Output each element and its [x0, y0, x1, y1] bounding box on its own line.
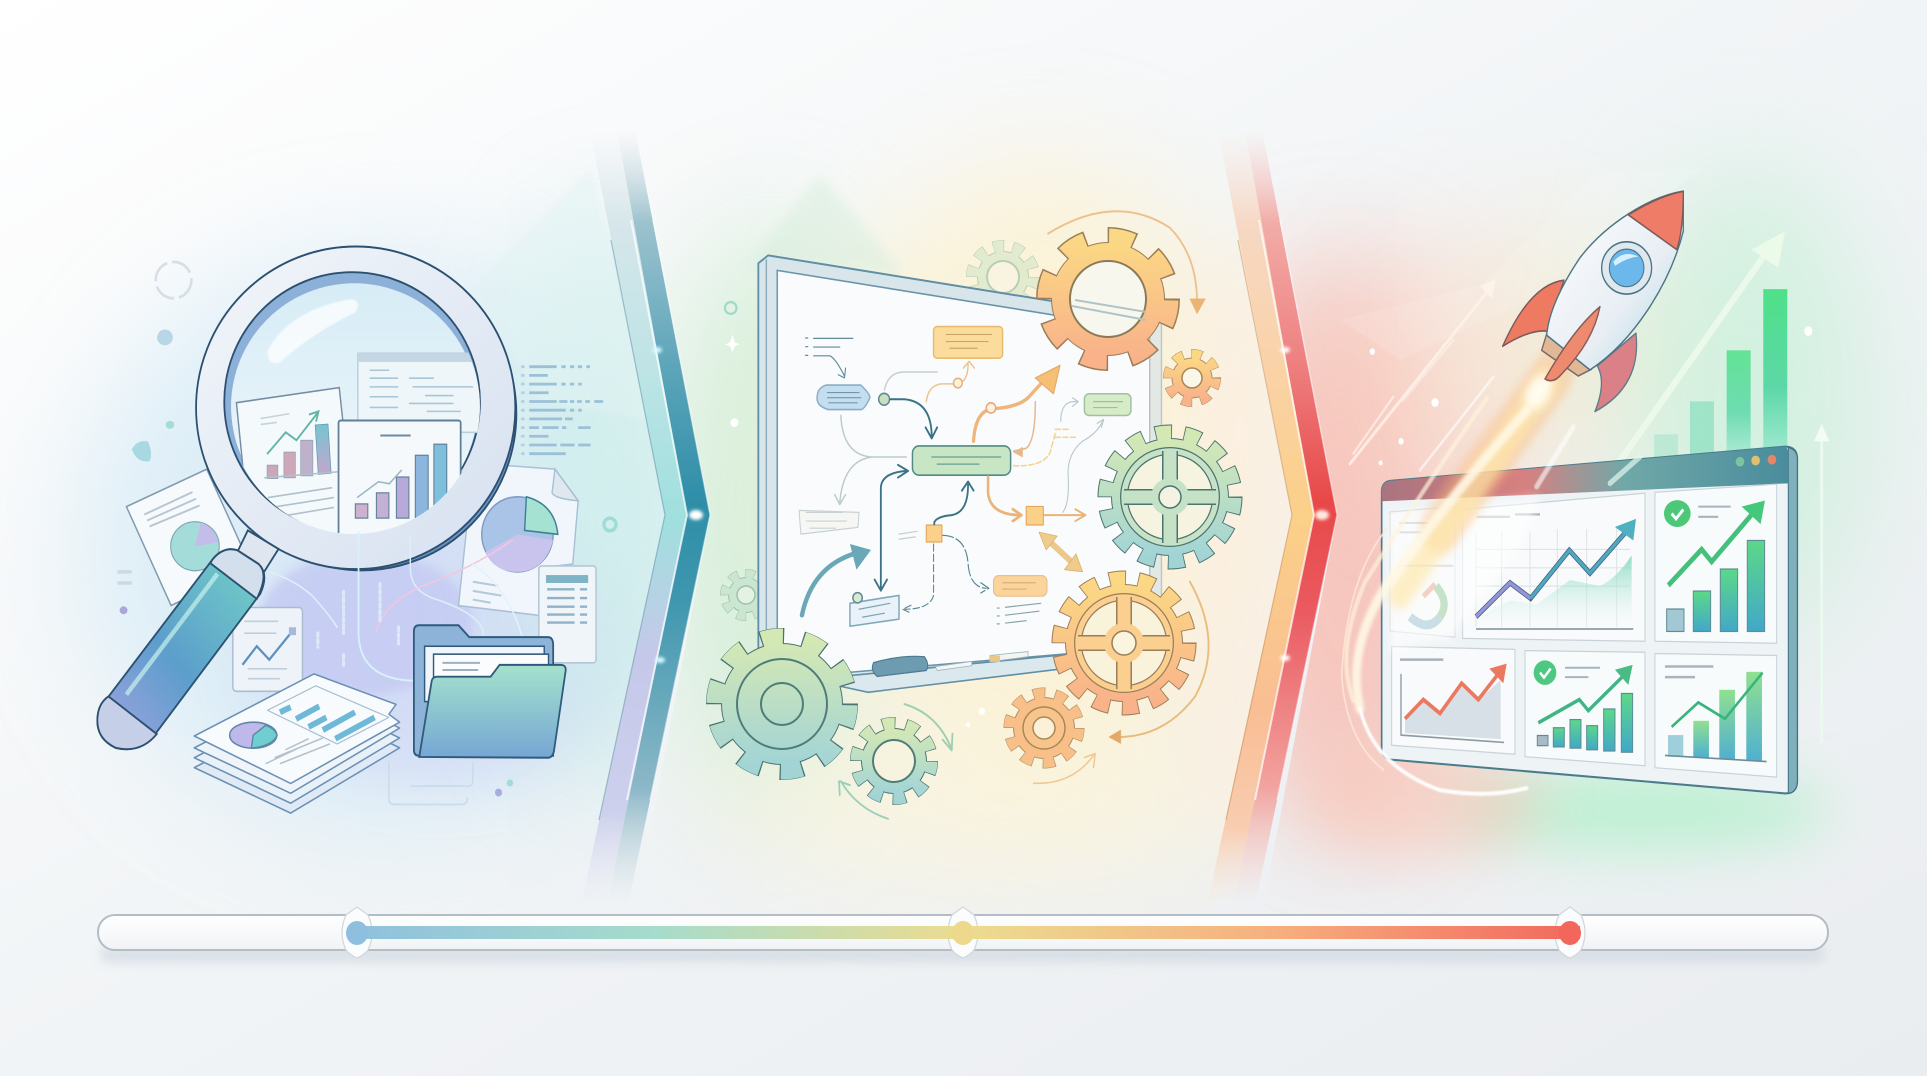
left fin [1503, 280, 1564, 346]
node: middle [952, 921, 974, 945]
gear: faint top [973, 247, 1033, 307]
code lines [521, 367, 603, 454]
lens contents [236, 353, 483, 537]
orange sticky note [934, 327, 1003, 358]
square node with branches [926, 525, 942, 542]
rocket [1503, 191, 1683, 412]
folder [414, 625, 566, 758]
card: donut [1390, 507, 1455, 637]
card: main line chart [1463, 493, 1645, 641]
card: mixed bars [1655, 653, 1777, 777]
card: green bars [1525, 651, 1645, 766]
rocket flame core [1519, 368, 1557, 416]
orange note, lower right [994, 576, 1047, 596]
lens highlight [267, 299, 358, 363]
card: green growth [1655, 484, 1777, 643]
document with pie, right [459, 465, 578, 615]
orange rising arrow [974, 376, 1048, 441]
list document [539, 566, 596, 663]
small line-chart document [233, 607, 302, 691]
whiteboard tray [841, 652, 1064, 692]
gear: large orange lower [1059, 578, 1189, 708]
white glare over dashboard [1390, 496, 1540, 651]
slider track [98, 915, 1828, 950]
rotation arrows [839, 211, 1209, 819]
centre fin [1545, 307, 1600, 381]
blue terminator node [817, 385, 870, 410]
gear: large green right [1105, 432, 1235, 562]
gear: faint left [725, 574, 767, 616]
progress slider [98, 907, 1828, 963]
right fin [1595, 333, 1637, 412]
chevron divider 1 [581, 130, 710, 905]
node: end [1559, 921, 1581, 945]
gradient fill [350, 926, 1580, 939]
decorative dots and rings [117, 262, 616, 804]
gear: large green bottom left [714, 636, 850, 772]
gear: small orange bottom [1009, 693, 1079, 763]
node housings [342, 907, 1585, 958]
background growth arrows [1350, 231, 1829, 741]
whiteboard frame [758, 255, 1161, 694]
small green node [1084, 394, 1131, 415]
paper stack [194, 674, 400, 813]
node: start [346, 921, 368, 945]
gear: large orange top [1044, 235, 1172, 363]
vertical double arrow [875, 465, 908, 591]
slider shadow [100, 945, 1825, 963]
double arrow [1048, 540, 1073, 564]
card: red line chart [1392, 647, 1515, 754]
panel: launch rocket and dashboard [1342, 191, 1829, 794]
flow diagram [799, 327, 1131, 626]
magnifier ring [196, 246, 516, 570]
engine [1542, 334, 1592, 376]
blue note, lower left [850, 593, 899, 626]
dashboard window [1382, 447, 1797, 793]
rocket body [1547, 191, 1683, 370]
sparkle dots [725, 302, 985, 727]
glowing circuit lines [269, 532, 523, 681]
text list, top left [806, 338, 853, 378]
orange square nodes and arrows [988, 477, 1022, 521]
gear: small orange upper right [1168, 354, 1216, 402]
gear: small green bottom [856, 723, 932, 799]
glow: lavender data field [259, 552, 473, 694]
grey faded note [799, 510, 859, 534]
document with pie, left [126, 469, 251, 606]
background green bars [1654, 289, 1787, 459]
panel: research magnifier [97, 246, 616, 813]
magnifier handle [97, 530, 279, 749]
nose cone [1628, 191, 1683, 250]
connector node and arrow to process [879, 393, 937, 438]
chevron divider 2 [1207, 130, 1337, 905]
rocket exhaust swoosh [1342, 340, 1640, 794]
central green process box [912, 446, 1011, 475]
panel: planning whiteboard with gears [714, 211, 1235, 819]
large curved blue arrow [802, 554, 854, 615]
porthole [1602, 242, 1652, 294]
